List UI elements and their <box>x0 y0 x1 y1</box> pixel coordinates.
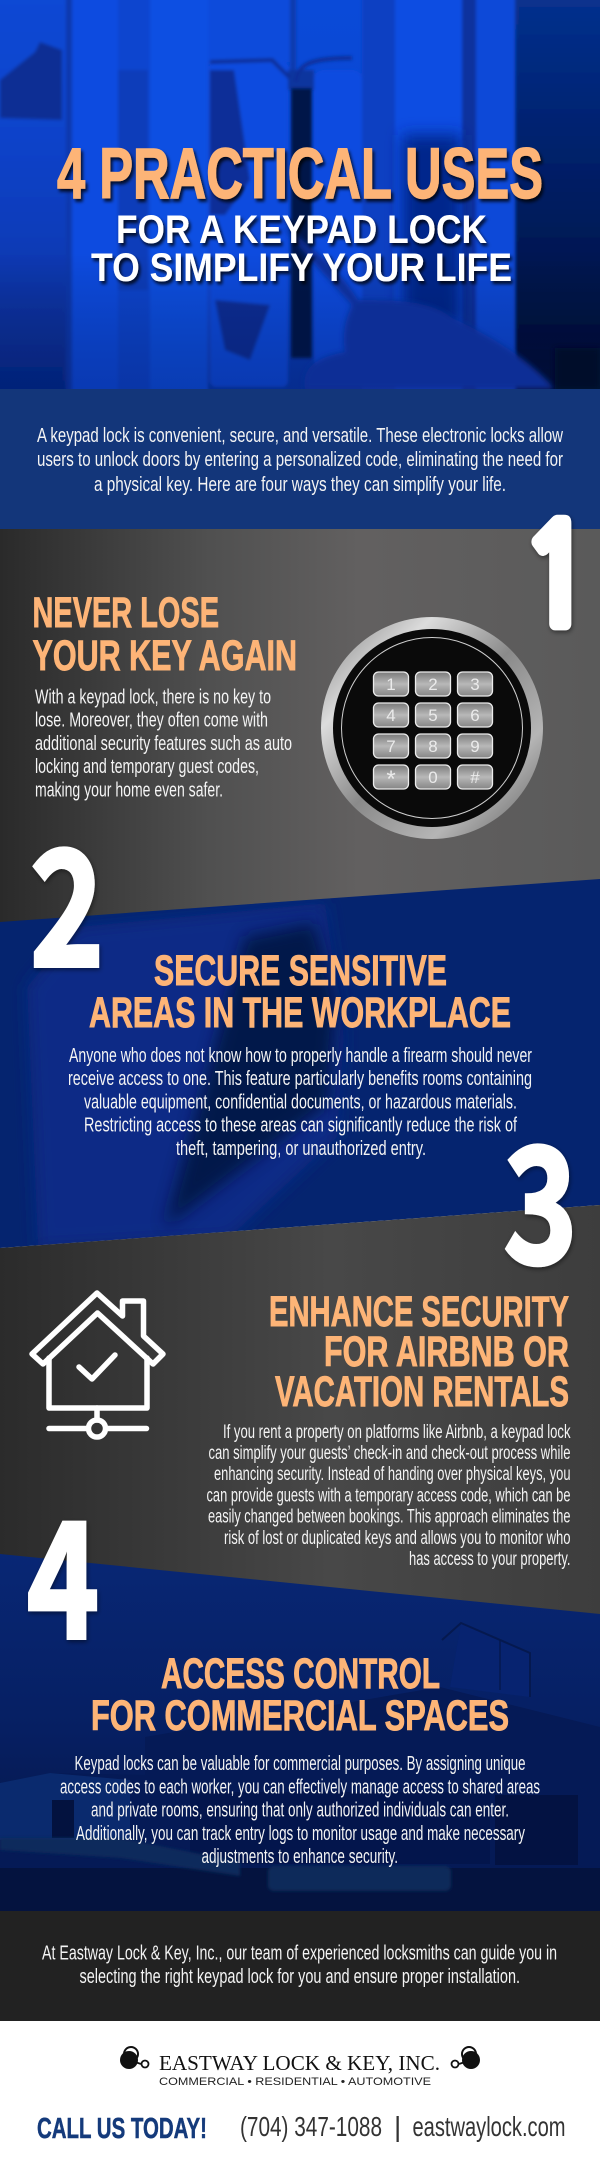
body text 1 <box>35 686 292 802</box>
heading: never lose your key again: NEVER LOSE <box>32 589 219 637</box>
icon: left padlock and key <box>120 2047 148 2069</box>
panel: 3 airbnb and vacation rentals <box>0 1078 600 1620</box>
panel: closing statement <box>0 1911 600 2021</box>
closing text <box>42 1942 557 1988</box>
body text 4 <box>60 1753 540 1868</box>
body text 1: With a keypad lock, there is no key to <box>35 686 271 708</box>
icon: round keypad: 6 <box>470 706 480 725</box>
icon: round keypad: 5 <box>428 706 438 725</box>
body text 1: additional security features such as auto <box>35 733 292 755</box>
panel: 2 secure sensitive areas <box>0 781 600 1260</box>
body text 2: theft, tampering, or unauthorized entry. <box>176 1138 426 1160</box>
title: TO SIMPLIFY YOUR LIFE <box>91 246 512 290</box>
icon: round keypad <box>321 617 543 839</box>
contact details: (704) 347-1088 <box>240 2111 382 2142</box>
contact details <box>240 2111 566 2142</box>
icon: round keypad: # <box>470 768 480 787</box>
panel: 4 commercial spaces <box>0 1520 600 1911</box>
icon: right padlock and key <box>452 2047 480 2069</box>
number 3: 3 <box>504 1078 578 1310</box>
icon: round keypad: 8 <box>428 737 438 756</box>
hero photo: hand on door keypad <box>0 0 600 395</box>
logo: EASTWAY LOCK & KEY, INC. <box>159 2051 440 2075</box>
icon: round keypad: * <box>386 766 396 793</box>
icon: round keypad: 0 <box>428 768 438 787</box>
body text 1: making your home even safer. <box>35 780 223 802</box>
body text 2 <box>68 1045 532 1160</box>
heading: secure sensitive areas <box>89 947 511 1037</box>
heading: access control <box>91 1650 509 1740</box>
hero panel <box>0 0 600 395</box>
heading: secure sensitive areas: SECURE SENSITIVE <box>154 947 447 995</box>
logo: COMMERCIAL • RESIDENTIAL • AUTOMOTIVE <box>159 2076 431 2088</box>
icon: round keypad: 4 <box>386 706 396 725</box>
background: blue building photo <box>0 1550 600 1911</box>
body text 3 <box>206 1422 571 1570</box>
icon: round keypad: 3 <box>470 675 480 694</box>
panel: 1 never lose your key <box>0 508 600 929</box>
icon: house with check and network node <box>32 1293 163 1437</box>
title: FOR A KEYPAD LOCK <box>116 208 487 252</box>
heading: never lose your key again: YOUR KEY AGAIN <box>32 632 297 680</box>
intro text <box>37 425 563 496</box>
icon: round keypad: 1 <box>386 675 396 694</box>
background: blue keypad photo <box>0 870 600 1260</box>
title <box>57 135 543 290</box>
icon: round keypad: 2 <box>428 675 438 694</box>
heading: never lose your key again <box>32 589 297 680</box>
logo <box>120 2047 480 2088</box>
body text 4: adjustments to enhance security. <box>202 1846 398 1868</box>
call to action: CALL US TODAY! <box>37 2113 207 2145</box>
heading: access control: ACCESS CONTROL <box>161 1650 440 1698</box>
icon: round keypad: 9 <box>470 737 480 756</box>
number 4: 4 <box>27 1453 99 1685</box>
heading: enhance security <box>269 1288 569 1416</box>
panel: introduction <box>0 389 600 529</box>
body text 1: locking and temporary guest codes, <box>35 756 259 778</box>
contact details: | <box>394 2111 401 2142</box>
icon: round keypad: 7 <box>386 737 396 756</box>
body text 1: lose. Moreover, they often come with <box>35 710 268 732</box>
panel: footer <box>0 2021 600 2157</box>
number 2: 2 <box>30 781 104 1013</box>
